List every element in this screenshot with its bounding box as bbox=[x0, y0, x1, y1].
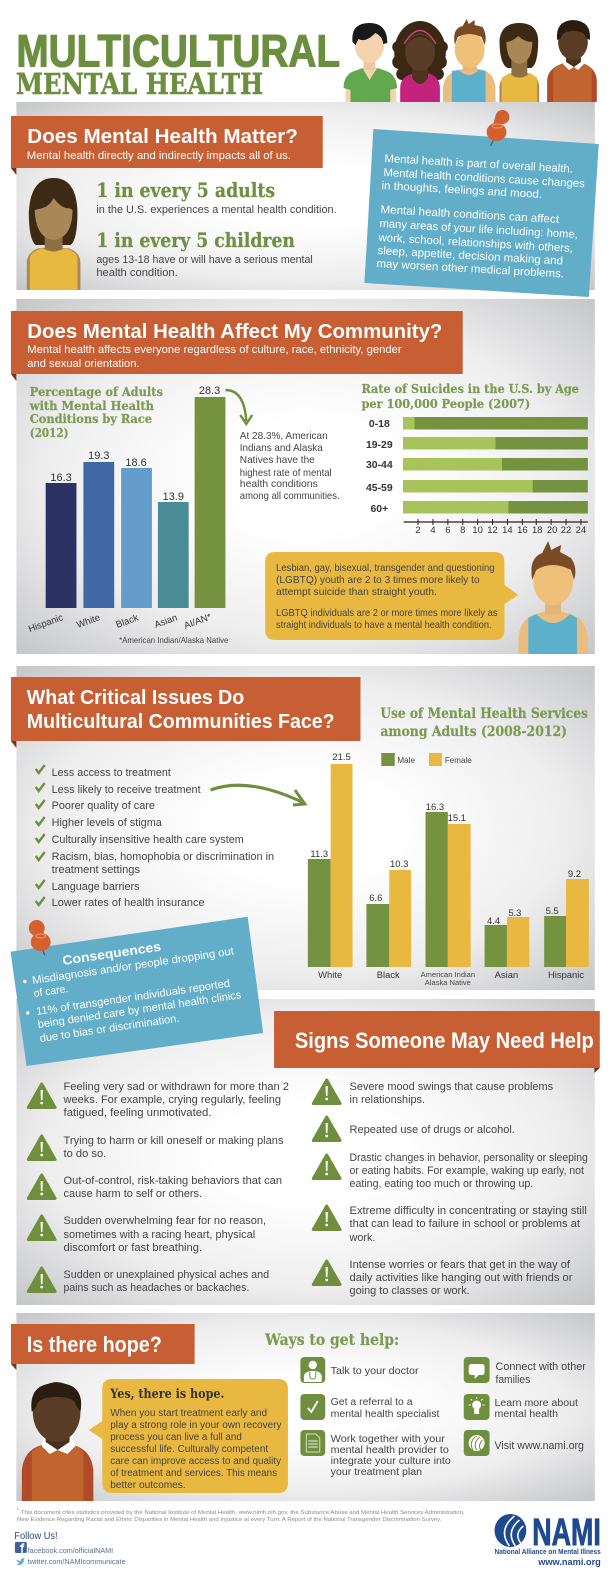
person: blue tank top bbox=[443, 19, 496, 102]
bar chart: adults by race: Black bbox=[115, 612, 140, 631]
help option: referral: Get a referral to a bbox=[331, 1397, 413, 1408]
help option: learn more: Learn more about bbox=[495, 1398, 578, 1409]
person: magenta shirt bbox=[392, 21, 448, 102]
heading: ways to get help: Ways to get help: bbox=[264, 1330, 399, 1349]
banner heading: Does Mental Health Matter? bbox=[27, 126, 298, 148]
bar chart: suicide rate by age: 19-29 bbox=[366, 440, 393, 451]
banner heading: Mental health affects everyone regardless of culture, race, ethnicity, gender bbox=[27, 344, 402, 356]
panel: is there hope bbox=[11, 1313, 595, 1501]
panel: signs someone may need help bbox=[16, 999, 600, 1305]
banner heading bbox=[11, 116, 323, 175]
footnote: New Evidence Regarding Racial and Ethnic Disparities in Mental Health and Injustice at every Turn: A Report of the National Transgender Discrimination Survey. bbox=[17, 1517, 441, 1523]
illustration: woman bbox=[27, 178, 80, 290]
bar chart: suicide rate by age: 12 bbox=[487, 525, 498, 536]
checklist: Less access to treatment bbox=[52, 767, 171, 779]
help option: connect with families: families bbox=[496, 1374, 530, 1386]
chart title: suicide rate bbox=[361, 381, 579, 411]
follow us links: twitter.com/NAMIcommunicate bbox=[28, 1559, 126, 1566]
help option: learn more: mental health bbox=[495, 1409, 558, 1420]
warning signs: right column text: Severe mood swings that cause problems bbox=[350, 1081, 553, 1093]
bar chart: service use: Alaska Native bbox=[425, 978, 471, 987]
title: MULTICULTURAL bbox=[16, 25, 340, 77]
callout: yes there is hope: play a strong role in your own recovery bbox=[110, 1420, 282, 1431]
callout: LGBTQ speech bubble: straight individuals to have a mental health condition. bbox=[276, 620, 492, 631]
note: mental health is part of overall health: Mental health is part of overall health. bbox=[384, 153, 573, 176]
callout: yes there is hope: process you can live a full and bbox=[110, 1432, 242, 1443]
checklist: Lower rates of health insurance bbox=[52, 897, 205, 909]
warning signs: right column text bbox=[349, 1081, 588, 1297]
callout: yes there is hope bbox=[89, 1379, 288, 1493]
chart title: adults by race: with Mental Health bbox=[29, 398, 154, 413]
bar chart: service use bbox=[308, 752, 589, 987]
banner heading bbox=[11, 311, 463, 381]
callout: yes there is hope: Yes, there is hope. bbox=[109, 1387, 224, 1402]
statistic: children: ages 13-18 have or will have a serious mental bbox=[96, 254, 313, 266]
bar chart: suicide rate by age: 6 bbox=[445, 525, 450, 536]
help option: work with provider: integrate your culture into bbox=[331, 1456, 451, 1467]
warning signs: left column text bbox=[63, 1081, 289, 1294]
help option: doctor bbox=[300, 1357, 419, 1383]
statistic: children bbox=[96, 228, 313, 279]
person: green shirt bbox=[344, 23, 397, 102]
callout: LGBTQ speech bubble: attempt suicide than straight youth. bbox=[276, 587, 437, 598]
chart title: suicide rate: per 100,000 People (2007) bbox=[361, 396, 530, 411]
bar chart: suicide rate by age: 60+ bbox=[370, 504, 388, 515]
banner heading: Is there hope? bbox=[27, 1332, 162, 1357]
legend bbox=[381, 753, 472, 766]
chart title: services: Use of Mental Health Services bbox=[380, 706, 588, 722]
chart title: adults by race: Percentage of Adults bbox=[30, 384, 163, 399]
callout: AI/AN rate: among all communities. bbox=[240, 491, 340, 502]
note: consequences: Misdiagnosis and/or people dropping out bbox=[31, 945, 235, 987]
illustration: man bbox=[22, 1382, 93, 1501]
warning icons: right column bbox=[313, 1080, 340, 1284]
chart title: adults by race bbox=[29, 384, 163, 440]
callout: AI/AN rate: At 28.3%, American bbox=[240, 431, 328, 442]
banner heading: Multicultural Communities Face? bbox=[27, 711, 335, 733]
callout: yes there is hope: successful life. Culturally competent bbox=[110, 1444, 268, 1455]
warning signs: left column text: Trying to harm or kill oneself or making plans bbox=[64, 1135, 284, 1147]
chart title: services bbox=[380, 706, 588, 740]
icon: facebook bbox=[15, 1542, 27, 1553]
bar chart: service use: 10.3 bbox=[390, 859, 408, 870]
person: orange sweater bbox=[547, 20, 597, 102]
follow us links: Follow Us! bbox=[14, 1531, 58, 1542]
bar chart: adults by race: 19.3 bbox=[88, 450, 109, 462]
callout: LGBTQ speech bubble: Lesbian, gay, bisexual, transgender and questioning bbox=[276, 563, 495, 574]
bar chart: adults by race bbox=[27, 385, 229, 645]
callout: AI/AN rate: highest rate of mental bbox=[240, 468, 332, 479]
legend: Female bbox=[445, 756, 472, 765]
callout: LGBTQ speech bubble: (LGBTQ) youth are 2 to 3 times more likely to bbox=[276, 575, 480, 586]
warning signs: right column text: Drastic changes in behavior, personality or sleeping bbox=[350, 1152, 588, 1164]
warning icons: left column bbox=[28, 1084, 55, 1292]
footnote: This document cites statistics provided by the National Institute of Mental Health, www.nimh.nih.gov, the Substance Abuse and Mental Health Services Administration, bbox=[21, 1510, 465, 1516]
note: consequences: due to bias or discrimination. bbox=[39, 1013, 180, 1045]
warning signs: right column text: or eating habits. For example, waking up early, not bbox=[350, 1165, 584, 1177]
bar chart: suicide rate by age: 0-18 bbox=[369, 419, 390, 430]
follow us links: facebook.com/officialNAMI bbox=[28, 1548, 113, 1555]
bar chart: suicide rate by age: 2 bbox=[415, 525, 421, 536]
checklist: Culturally insensitive health care system bbox=[52, 834, 244, 846]
warning signs: right column text: eating, eating too much or throwing up. bbox=[350, 1178, 533, 1190]
help option: visit website: Visit www.nami.org bbox=[495, 1440, 584, 1452]
note: mental health is part of overall health: Mental health conditions can affect bbox=[380, 204, 560, 226]
callout: LGBTQ speech bubble: LGBTQ individuals are 2 or more times more likely as bbox=[276, 608, 498, 619]
logo: NAMI: www.nami.org bbox=[537, 1557, 601, 1567]
chart title: services: among Adults (2008-2012) bbox=[380, 724, 567, 740]
checklist: Language barriers bbox=[52, 881, 140, 893]
warning signs: left column text: to do so. bbox=[64, 1148, 106, 1160]
callout: AI/AN rate bbox=[240, 431, 340, 502]
banner heading bbox=[11, 1324, 195, 1370]
illustration: boy bbox=[518, 541, 588, 654]
bar chart: service use: 15.1 bbox=[448, 813, 466, 824]
panel: does mental health matter bbox=[11, 102, 595, 290]
checklist: Higher levels of stigma bbox=[52, 817, 162, 829]
banner heading bbox=[11, 677, 360, 748]
callout: yes there is hope: better outcomes. bbox=[110, 1480, 186, 1491]
panel: does mental health affect my community bbox=[11, 299, 595, 654]
checklist: Less likely to receive treatment bbox=[52, 784, 201, 796]
chart title: adults by race: (2012) bbox=[30, 425, 69, 440]
chart title: adults by race: Conditions by Race bbox=[30, 411, 152, 426]
callout: AI/AN rate: Natives have the bbox=[240, 455, 315, 466]
warning signs: right column text: daily activities like hanging out with friends or bbox=[350, 1272, 573, 1284]
help option: learn more bbox=[464, 1394, 578, 1420]
warning signs: left column text: Sudden overwhelming fear for no reason, bbox=[64, 1215, 266, 1227]
help option: work with provider: mental health provider to bbox=[331, 1445, 449, 1456]
note: consequences: being denied care by mental health clinics bbox=[37, 989, 243, 1031]
bar chart: service use: White bbox=[318, 970, 342, 981]
warning signs: left column text: Feeling very sad or withdrawn for more than 2 bbox=[64, 1081, 289, 1093]
bar chart: suicide rate by age: 20 bbox=[547, 525, 557, 536]
callout: LGBTQ speech bubble bbox=[265, 552, 518, 640]
illustration: group of five people bbox=[344, 19, 597, 102]
warning signs: right column text: Extreme difficulty in concentrating or staying still bbox=[350, 1205, 587, 1217]
warning signs: right column text: Intense worries or fears that get in the way of bbox=[350, 1259, 570, 1271]
checklist: Poorer quality of care bbox=[52, 800, 155, 812]
warning signs: right column text: that can lead to failure in school or problems at bbox=[350, 1218, 580, 1230]
callout: yes there is hope: care can improve access to and quality bbox=[110, 1456, 282, 1467]
bar chart: suicide rate by age: 8 bbox=[460, 525, 465, 536]
note: consequences bbox=[11, 917, 263, 1066]
banner heading: What Critical Issues Do bbox=[27, 687, 244, 709]
help option: work with provider: your treatment plan bbox=[331, 1467, 422, 1478]
bar chart: adults by race: 13.9 bbox=[163, 491, 184, 503]
callout: yes there is hope: When you start treatment early and bbox=[110, 1408, 267, 1419]
warning signs: left column text: discomfort or fast breathing. bbox=[64, 1242, 202, 1254]
note: mental health is part of overall health: sleep, appetite, decision making and bbox=[377, 245, 563, 267]
checklist bbox=[36, 765, 274, 909]
note: consequences: Consequences bbox=[61, 939, 162, 968]
chart title: suicide rate: Rate of Suicides in the U.S. by Age bbox=[361, 381, 579, 396]
note: mental health is part of overall health: Mental health conditions cause changes bbox=[383, 167, 585, 190]
bar chart: suicide rate by age: 14 bbox=[502, 525, 513, 536]
callout: AI/AN rate: health conditions bbox=[240, 479, 318, 490]
icon: twitter bbox=[16, 1558, 25, 1565]
legend: Male bbox=[397, 756, 416, 765]
warning signs: left column text: Out-of-control, risk-taking behaviors that can bbox=[64, 1175, 282, 1187]
title: MENTAL HEALTH bbox=[16, 67, 263, 101]
bar chart: suicide rate by age: 10 bbox=[472, 525, 483, 536]
panel: what critical issues bbox=[11, 666, 595, 990]
bar chart: suicide rate by age: 22 bbox=[561, 525, 571, 536]
warning signs: right column text: Repeated use of drugs or alcohol. bbox=[350, 1124, 515, 1136]
warning signs: left column text: sometimes with a racing heart, physical bbox=[64, 1229, 255, 1241]
icon: push pin on consequences note bbox=[29, 920, 51, 955]
bar chart: service use: 21.5 bbox=[332, 752, 351, 763]
bar chart: suicide rate by age: 24 bbox=[576, 525, 586, 536]
note: mental health is part of overall health: in thoughts, feelings and mood. bbox=[381, 180, 542, 201]
bar chart: service use: American Indian bbox=[421, 970, 475, 979]
bar chart: service use: Hispanic bbox=[548, 970, 584, 981]
note: mental health is part of overall health: may worsen other medical problems. bbox=[376, 258, 564, 281]
warning signs: right column text: going to classes or work. bbox=[350, 1285, 470, 1297]
warning signs: left column text: Sudden or unexplained physical aches and bbox=[64, 1269, 269, 1281]
logo: NAMI: National Alliance on Mental Illness bbox=[495, 1549, 601, 1556]
help option: work with provider bbox=[300, 1430, 451, 1478]
checklist: treatment settings bbox=[52, 864, 140, 876]
bar chart: adults by race: *American Indian/Alaska Native bbox=[119, 636, 229, 645]
bar chart: adults by race: 18.6 bbox=[125, 457, 147, 469]
arrow to service chart bbox=[211, 785, 305, 805]
bar chart: adults by race: 28.3 bbox=[199, 385, 220, 397]
banner heading: Does Mental Health Affect My Community? bbox=[27, 321, 442, 343]
checklist: Racism, bias, homophobia or discrimination in bbox=[52, 851, 274, 863]
callout: AI/AN rate: Indians and Alaska bbox=[240, 443, 323, 454]
statistic: adults bbox=[96, 178, 337, 216]
bar chart: service use: 5.3 bbox=[508, 908, 521, 919]
bar chart: service use: 16.3 bbox=[426, 802, 444, 813]
bar chart: service use: 6.6 bbox=[369, 893, 382, 904]
warning signs: left column text: fatigued, feeling unmotivated. bbox=[64, 1107, 212, 1119]
person: yellow shirt bbox=[499, 23, 539, 102]
follow us links bbox=[14, 1531, 126, 1566]
warning signs: right column text: in relationships. bbox=[350, 1094, 425, 1106]
bar chart: suicide rate by age: 30-44 bbox=[366, 460, 393, 471]
help option: connect with families bbox=[464, 1357, 586, 1386]
note: mental health is part of overall health: work, school, relationships with others, bbox=[377, 232, 573, 255]
banner heading bbox=[274, 1011, 600, 1073]
help option: referral: mental health specialist bbox=[331, 1409, 440, 1420]
bar chart: adults by race: 16.3 bbox=[50, 472, 72, 484]
bar chart: service use: 4.4 bbox=[487, 916, 500, 927]
banner heading: Mental health directly and indirectly impacts all of us. bbox=[27, 150, 291, 162]
bar chart: adults by race: White bbox=[75, 612, 102, 631]
statistic: children: health condition. bbox=[96, 267, 178, 279]
warning signs: left column text: weeks. For example, crying regularly, feeling bbox=[63, 1094, 281, 1106]
footnote: 1 bbox=[17, 1506, 20, 1511]
bar chart: service use: 11.3 bbox=[310, 849, 328, 860]
logo: NAMI bbox=[495, 1512, 601, 1567]
bar chart: service use: Black bbox=[377, 970, 400, 981]
statistic: children: 1 in every 5 children bbox=[96, 228, 295, 252]
title bbox=[16, 25, 340, 101]
warning signs: left column text: cause harm to self or others. bbox=[64, 1188, 202, 1200]
note: consequences: of care. bbox=[33, 983, 69, 1000]
help option: referral bbox=[300, 1394, 440, 1420]
bar chart: adults by race: Hispanic bbox=[27, 612, 65, 635]
bar chart: suicide rate by age: 45-59 bbox=[366, 483, 393, 494]
help option: doctor: Talk to your doctor bbox=[331, 1366, 419, 1377]
banner heading: Signs Someone May Need Help bbox=[295, 1028, 594, 1053]
statistic: adults: in the U.S. experiences a mental health condition. bbox=[96, 204, 337, 216]
bar chart: service use: Asian bbox=[495, 970, 518, 981]
bar chart: suicide rate by age: 4 bbox=[430, 525, 436, 536]
statistic: adults: 1 in every 5 adults bbox=[96, 178, 275, 202]
bar chart: service use: 9.2 bbox=[568, 869, 581, 880]
help option: visit website bbox=[464, 1430, 584, 1456]
callout: yes there is hope: of treatment and services. This means bbox=[110, 1468, 277, 1479]
note: mental health is part of overall health bbox=[364, 129, 599, 297]
help option: connect with families: Connect with other bbox=[496, 1361, 586, 1373]
warning signs: left column text: pains such as headaches or backaches. bbox=[64, 1282, 249, 1294]
arrow to callout bbox=[225, 390, 252, 424]
bar chart: adults by race: AI/AN* bbox=[183, 611, 213, 632]
help option: work with provider: Work together with your bbox=[331, 1434, 445, 1445]
icon: push pin on note bbox=[487, 110, 509, 146]
bar chart: suicide rate by age bbox=[366, 417, 588, 536]
bar chart: suicide rate by age: 18 bbox=[532, 525, 542, 536]
bar chart: service use: 5.5 bbox=[546, 906, 559, 917]
bar chart: suicide rate by age: 16 bbox=[517, 525, 528, 536]
warning signs: right column text: work. bbox=[349, 1232, 375, 1244]
note: mental health is part of overall health: many areas of your life including: home, bbox=[379, 218, 578, 241]
bar chart: adults by race: Asian bbox=[153, 612, 179, 631]
banner heading: and sexual orientation. bbox=[27, 358, 140, 370]
footnote bbox=[17, 1506, 465, 1523]
note: consequences: 11% of transgender individuals reported bbox=[35, 978, 231, 1018]
